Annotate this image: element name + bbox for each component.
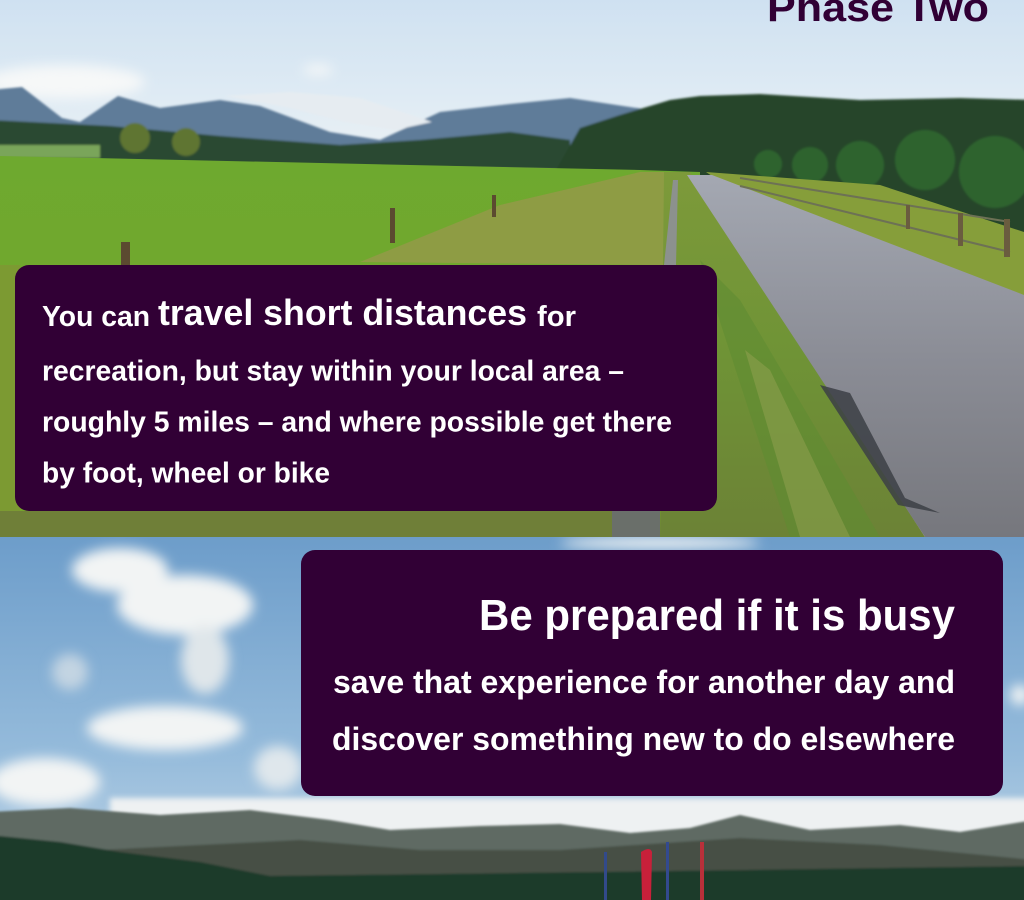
text: travel guidance: by foot, wheel or bike xyxy=(42,458,330,490)
photo: mountains under a cloudy sky xyxy=(0,537,1024,900)
text: busy guidance: discover something new to do elsewhere xyxy=(332,721,955,757)
ground xyxy=(0,156,700,537)
text: travel guidance: recreation, but stay within your local area – xyxy=(42,356,624,388)
text: busy guidance xyxy=(332,591,955,757)
text: busy guidance: save that experience for another day and xyxy=(333,664,955,700)
text: travel guidance: You can xyxy=(42,301,150,333)
text: busy guidance: Be prepared if it is busy xyxy=(479,591,955,640)
text: travel guidance: roughly 5 miles – and where possible get there xyxy=(42,406,672,438)
text: travel guidance: travel short distances xyxy=(158,292,527,333)
photo: country road and green field xyxy=(0,0,1024,537)
text: travel guidance: for xyxy=(537,301,576,333)
text: travel guidance xyxy=(42,292,672,490)
panel: travel short distances xyxy=(15,265,717,511)
panel: be prepared if busy xyxy=(301,550,1003,796)
